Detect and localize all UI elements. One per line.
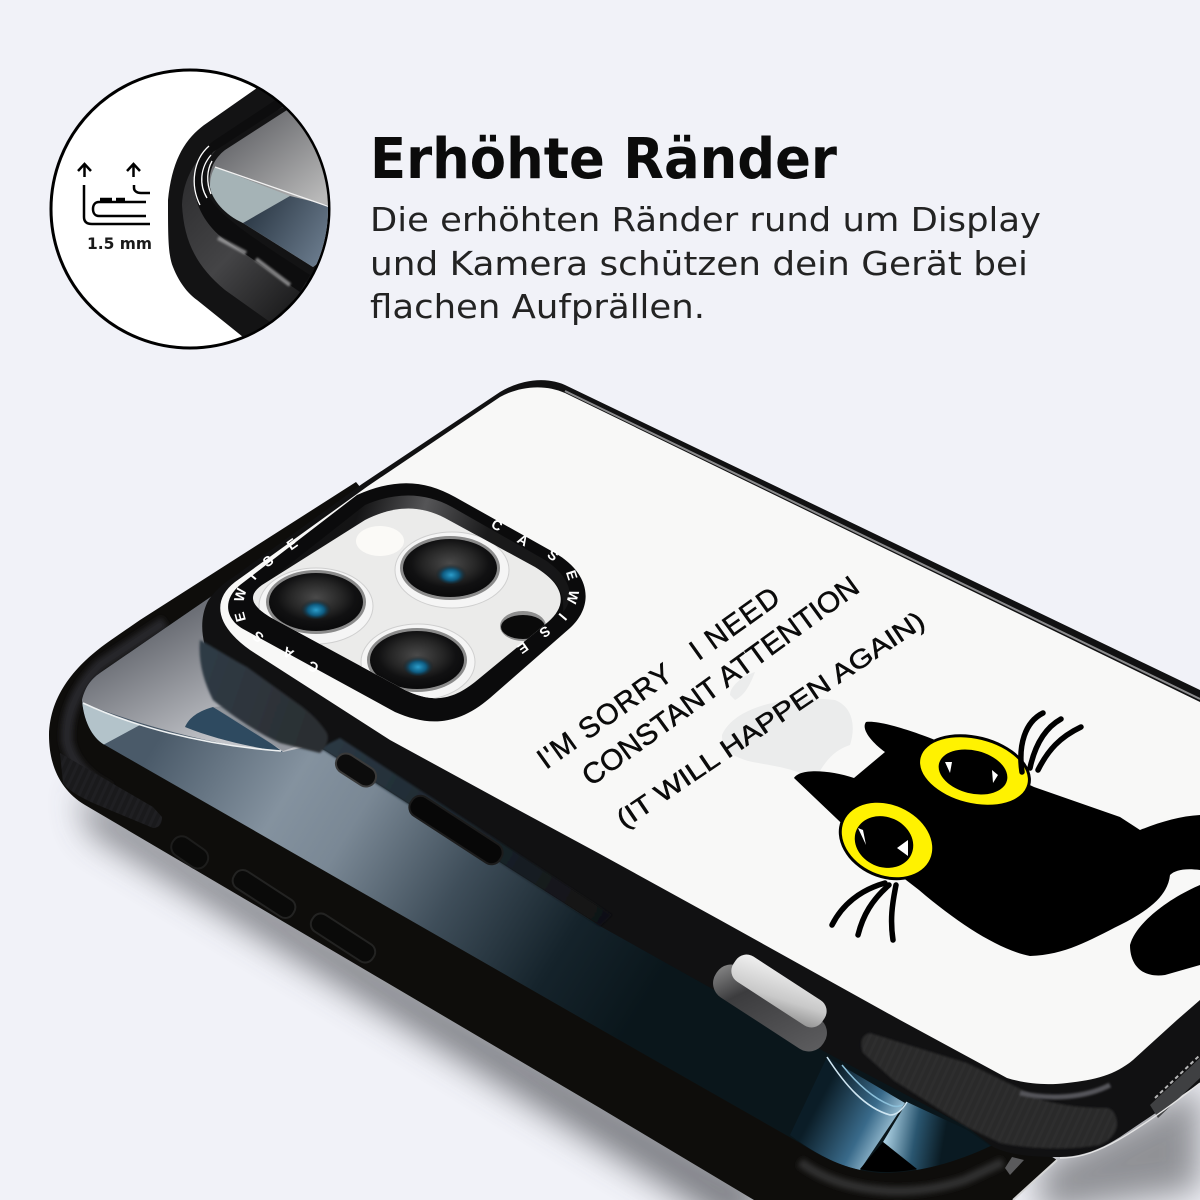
measurement label: 1.5 mm bbox=[87, 234, 152, 253]
lens right bbox=[395, 532, 509, 608]
CASEWISE ring lettering: S bbox=[544, 546, 562, 564]
lens bottom bbox=[361, 624, 475, 700]
case body bbox=[202, 380, 1200, 1157]
white rim line under corner bbox=[1060, 1083, 1200, 1158]
CASEWISE ring lettering: E bbox=[563, 568, 581, 582]
description text: flachen Aufprällen. bbox=[370, 287, 705, 326]
lower rim sheen bbox=[800, 1162, 1003, 1191]
translucent underside bbox=[320, 738, 612, 926]
CASEWISE ring lettering: W bbox=[231, 586, 250, 603]
cat eye right bbox=[909, 723, 1039, 819]
CASEWISE ring lettering: S bbox=[537, 623, 553, 641]
lenses and flash bbox=[259, 526, 546, 700]
flash bbox=[356, 526, 404, 556]
rim highlight bbox=[67, 622, 165, 790]
CASEWISE ring lettering: I bbox=[245, 569, 259, 583]
cat tail bbox=[1130, 885, 1200, 976]
screen in close-up bbox=[210, 110, 335, 267]
CASEWISE ring lettering bbox=[231, 516, 582, 676]
upper phone case bbox=[200, 380, 1200, 1158]
inner dark lip bbox=[194, 97, 310, 292]
right speaker panel bbox=[1150, 1055, 1200, 1118]
lighter bumper band bbox=[182, 100, 310, 322]
CASEWISE ring lettering: A bbox=[280, 644, 296, 662]
band highlights bbox=[218, 238, 290, 285]
CASEWISE ring lettering: E bbox=[284, 535, 300, 553]
handwritten slogan: I'M SORRY I NEED bbox=[531, 581, 786, 776]
camera window bbox=[253, 508, 561, 698]
charging port bbox=[707, 950, 833, 1058]
apple logo ghost bbox=[722, 672, 853, 780]
raised edge diagram bbox=[78, 164, 150, 224]
handwritten slogan: (IT WILL HAPPEN AGAIN) bbox=[611, 605, 930, 834]
cat body bbox=[794, 722, 1200, 956]
callout circle: raised edge close-up bbox=[51, 60, 340, 348]
camera bumper bbox=[228, 483, 586, 721]
black ring outer bbox=[228, 483, 586, 721]
phone drop shadows bbox=[80, 790, 1200, 1200]
side buttons bbox=[332, 750, 506, 868]
cat eye left bbox=[826, 785, 948, 895]
impact arcs bbox=[194, 146, 212, 205]
lidar sensor bbox=[500, 611, 546, 641]
device screen bbox=[82, 596, 991, 1173]
circle background bbox=[51, 70, 329, 348]
side bumper pad at camera bbox=[200, 640, 328, 753]
description text bbox=[370, 200, 1041, 326]
bottom bumper pad bbox=[861, 1033, 1117, 1149]
whiskers bbox=[832, 713, 1081, 940]
lower port glint bbox=[1005, 1157, 1024, 1175]
CASEWISE ring lettering: W bbox=[563, 589, 582, 606]
CASEWISE ring lettering: E bbox=[515, 639, 531, 657]
silver bottom edge bbox=[1013, 1160, 1057, 1200]
cat illustration bbox=[794, 713, 1200, 976]
inner lip shade bbox=[257, 495, 570, 612]
lens left bbox=[259, 568, 373, 644]
CASEWISE ring lettering: E bbox=[231, 610, 249, 624]
CASEWISE ring lettering: S bbox=[249, 628, 267, 646]
CASEWISE ring lettering: C bbox=[489, 516, 505, 534]
lower corner sheen bbox=[1020, 1085, 1110, 1097]
CASEWISE ring lettering: C bbox=[305, 658, 321, 676]
lower phone in black case bbox=[49, 470, 1057, 1200]
description text: und Kamera schützen dein Gerät bei bbox=[370, 244, 1028, 283]
CASEWISE ring lettering: I bbox=[556, 610, 570, 624]
case corner bbox=[168, 88, 316, 336]
CASEWISE ring lettering: A bbox=[515, 531, 531, 549]
handwritten slogan: CONSTANT ATTENTION bbox=[576, 570, 865, 793]
CASEWISE ring lettering: S bbox=[260, 552, 276, 570]
corner bumper pad bbox=[60, 753, 162, 828]
close-up of phone corner bbox=[168, 88, 328, 336]
case rim bbox=[49, 482, 1057, 1200]
volume and mute buttons bbox=[167, 832, 379, 966]
title: Erhöhte Ränder bbox=[370, 127, 837, 192]
description text: Die erhöhten Ränder rund um Display bbox=[370, 200, 1041, 239]
handwritten slogan bbox=[531, 570, 930, 834]
edge highlight bbox=[565, 391, 1200, 699]
white back plate bbox=[220, 387, 1200, 1084]
